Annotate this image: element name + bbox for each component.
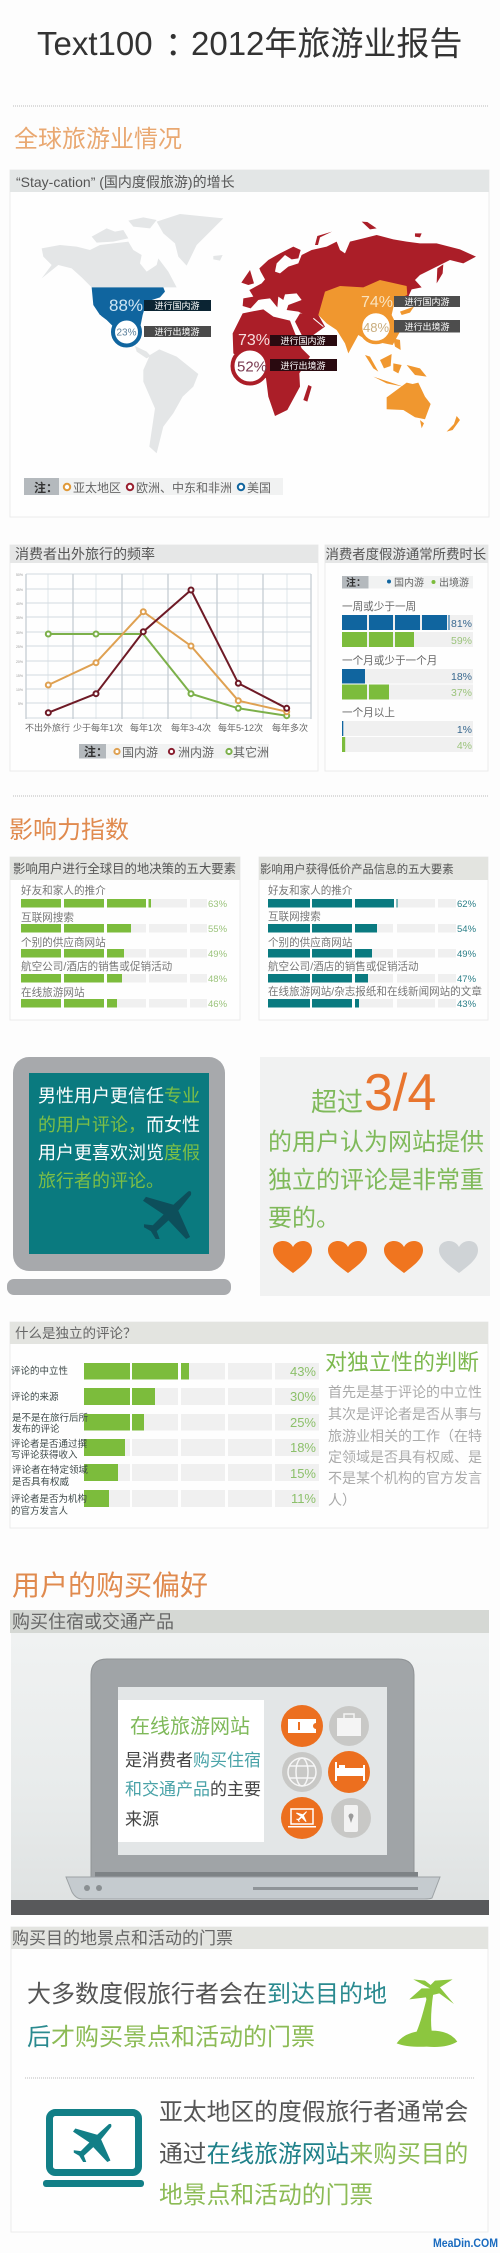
icon: bed <box>328 1751 370 1793</box>
stat: APAC outbound 48% <box>360 312 460 342</box>
x axis labels: 不出外旅行 <box>25 722 70 733</box>
callout: three quarters stat: 的用户认为网站提供 <box>268 1129 484 1156</box>
chart legend: 国内游 <box>122 746 158 760</box>
stat: US domestic 88%: 进行国内游 <box>154 300 200 311</box>
text: tickets after arrival: 大多数度假旅行者会在到达目的地 <box>27 1981 387 2008</box>
bar chart: independent review criteria: 18% <box>290 1440 316 1455</box>
text: APAC online purchase: 地景点和活动的门票 <box>159 2182 373 2209</box>
duration bars: over one month: 4% <box>457 740 472 752</box>
callout text: gender <box>38 1086 200 1191</box>
duration legend <box>342 576 473 589</box>
chart legend: 注： <box>84 744 108 759</box>
bar chart: independent review criteria: 评论的中立性 <box>11 1365 69 1377</box>
callout: three quarters stat: 要的。 <box>268 1205 340 1232</box>
bar rows: destination factors: 49% <box>208 949 228 960</box>
bar rows: destination factors: 48% <box>208 974 228 985</box>
stat: APAC domestic 74%: 74% <box>361 294 393 311</box>
duration bars: one month or less: 一个月或少于一个月 <box>342 655 437 667</box>
icon: plane <box>143 1191 191 1239</box>
stat: US outbound 23%: 进行出境游 <box>154 326 200 337</box>
duration bars: over one month: 1% <box>457 724 472 736</box>
map legend: 注： <box>34 480 58 495</box>
stat: EMEA outbound 52%: 52% <box>237 358 267 376</box>
text card: online travel sites: 来源 <box>125 1810 159 1829</box>
callout text: gender: 男性用户更信任专业 <box>38 1086 200 1106</box>
x axis labels <box>25 722 308 733</box>
panel: travel frequency line chart <box>10 545 318 771</box>
bar rows: low-price factors: 43% <box>457 999 477 1010</box>
map: red europe, middle east and africa <box>233 222 476 416</box>
panel: buying accommodation and transport <box>10 1610 489 1915</box>
stat: APAC domestic 74%: 进行国内游 <box>404 296 450 307</box>
text: judging independence: 首先是基于评论的中立性 <box>328 1384 482 1400</box>
duration legend: 注： <box>346 576 366 589</box>
icon: phone map <box>331 1798 371 1838</box>
callout text: gender: 旅行者的评论。 <box>38 1171 164 1191</box>
line chart: 10% <box>16 688 23 692</box>
bar chart: independent review criteria: 15% <box>290 1466 316 1481</box>
bar rows: low-price factors: 62% <box>457 899 477 910</box>
panel: destination decision factors <box>10 857 240 1020</box>
x axis labels: 每年3-4次 <box>171 722 211 733</box>
x axis labels: 每年5-12次 <box>218 722 263 733</box>
text card: online travel sites <box>118 1700 264 1842</box>
callout: three quarters stat: 超过 <box>311 1087 363 1117</box>
map legend: 亚太地区 <box>73 480 121 495</box>
stat: US outbound 23%: 23% <box>116 328 137 338</box>
panel header: tickets: 购买目的地景点和活动的门票 <box>12 1929 233 1948</box>
text: judging independence: 对独立性的判断 <box>325 1350 479 1375</box>
icon: suitcase <box>329 1706 369 1746</box>
line: domestic <box>46 609 289 714</box>
text: judging independence: 其次是评论者是否从事与 <box>328 1406 482 1422</box>
bar rows: low-price factors: 在线旅游网站/杂志报纸和在线新闻网站的文章 <box>268 985 482 998</box>
duration bars: one week or less: 一周或少于一周 <box>342 601 416 613</box>
bar chart: independent review criteria: 43% <box>290 1364 316 1379</box>
heading: purchase preferences: 用户的购买偏好 <box>12 1570 208 1601</box>
map legend: 美国 <box>247 481 271 495</box>
laptop illustration <box>66 1659 440 1899</box>
duration bars: one month or less <box>342 655 473 700</box>
bar rows: destination factors: 在线旅游网站 <box>21 986 85 999</box>
duration bars: one week or less: 81% <box>451 618 472 630</box>
map legend <box>24 478 283 495</box>
panel header: low-price factors <box>259 857 488 880</box>
title: Text100 <box>37 25 153 62</box>
icon: laptop plane <box>281 1797 323 1839</box>
bar rows: low-price factors: 49% <box>457 949 477 960</box>
panel: buying attractions tickets <box>11 1927 488 2232</box>
line chart: 5% <box>18 702 23 706</box>
callout: three quarters stat: 独立的评论是非常重 <box>268 1167 484 1194</box>
bar chart: independent review criteria <box>11 1363 319 1517</box>
panel header: low-price factors: 影响用户获得低价产品信息的五大要素 <box>260 862 454 876</box>
bar rows: low-price factors: 个别的供应商网站 <box>268 936 353 949</box>
callout text: gender: 用户更喜欢浏览度假 <box>38 1143 200 1163</box>
text: tickets after arrival: 后才购买景点和活动的门票 <box>27 2024 315 2051</box>
line chart: 25% <box>16 645 23 649</box>
stat: US outbound 23% <box>113 318 211 346</box>
x axis labels: 少于每年1次 <box>73 722 123 733</box>
text card: online travel sites: 是消费者购买住宿 <box>125 1751 261 1770</box>
bar chart: independent review criteria: 11% <box>291 1491 316 1506</box>
panel header: frequency: 消费者出外旅行的频率 <box>15 546 155 562</box>
stat: EMEA domestic 73%: 73% <box>238 332 270 349</box>
bar chart: independent review criteria: 是否具有权威 <box>12 1476 70 1488</box>
bar rows: low-price factors: 好友和家人的推介 <box>268 884 353 897</box>
text: judging independence: 不是某个机构的官方发言 <box>328 1470 482 1486</box>
panel header: frequency <box>10 545 318 563</box>
bar chart: independent review criteria: 评论的来源 <box>11 1391 59 1403</box>
x axis labels: 每年多次 <box>272 722 308 733</box>
stat: EMEA outbound 52%: 进行出境游 <box>280 360 326 371</box>
title: 2012年旅游业报告 <box>191 25 462 62</box>
text: judging independence <box>325 1350 482 1508</box>
stat: EMEA domestic 73%: 进行国内游 <box>280 335 326 346</box>
callout text: gender: 的用户评论，而女性 <box>38 1115 200 1135</box>
duration bars: one week or less: 59% <box>451 635 472 647</box>
duration bars: one week or less <box>342 601 473 647</box>
stat: US domestic 88%: 88% <box>109 296 143 315</box>
stat: APAC outbound 48%: 48% <box>363 320 389 335</box>
bar rows: destination factors: 46% <box>208 999 228 1010</box>
line: other continents <box>46 632 289 718</box>
chart legend: 洲内游 <box>178 746 214 760</box>
icon: hearts rating <box>273 1241 478 1273</box>
line chart: 35% <box>16 616 23 620</box>
icon: globe <box>282 1752 322 1792</box>
bar chart: independent review criteria: 评论者是否为机构 <box>11 1493 87 1505</box>
panel header: stay-cation: “Stay-cation” (国内度假旅游)的增长 <box>16 174 235 190</box>
panel: low-price information factors <box>259 857 488 1020</box>
title: ： <box>165 25 198 62</box>
text: judging independence: 人） <box>328 1492 356 1508</box>
icon: palm island <box>397 1979 457 2047</box>
panel header: independent review <box>10 1322 488 1344</box>
duration bars: one month or less: 37% <box>451 687 472 699</box>
line: within continent <box>46 588 289 715</box>
text: judging independence: 旅游业相关的工作（在特 <box>328 1428 482 1444</box>
text: APAC online purchase: 通过在线旅游网站来购买目的 <box>159 2141 468 2168</box>
duration bars: over one month: 一个月以上 <box>342 707 395 719</box>
panel header: duration: 消费者度假游通常所费时长 <box>326 547 486 562</box>
line chart: 40% <box>16 602 23 606</box>
bar rows: low-price factors: 互联网搜索 <box>268 910 321 923</box>
bar chart: independent review criteria: 评论者在特定领域 <box>12 1464 89 1476</box>
bar chart: independent review criteria: 30% <box>290 1389 316 1404</box>
bar chart: independent review criteria: 是不是在旅行后所 <box>12 1412 89 1424</box>
bar chart: independent review criteria: 发布的评论 <box>12 1423 60 1435</box>
line chart: 45% <box>16 588 23 592</box>
bar rows: destination factors: 个别的供应商网站 <box>21 936 106 949</box>
panel header: accommodation <box>10 1610 489 1633</box>
line chart: 30% <box>16 631 23 635</box>
bar chart: independent review criteria: 写评论获得收入 <box>11 1449 78 1461</box>
icon: teal laptop with plane <box>43 2112 144 2187</box>
line chart: 15% <box>16 674 23 678</box>
map: blue united states <box>92 287 165 332</box>
panel header: stay-cation <box>10 170 489 192</box>
bar rows: destination factors: 55% <box>208 924 228 935</box>
stat: EMEA outbound 52% <box>232 348 337 384</box>
callout: three quarters stat <box>260 1057 490 1296</box>
panel header: accommodation: 购买住宿或交通产品 <box>12 1612 174 1632</box>
map: orange asia-pacific <box>318 280 460 432</box>
text: APAC online purchase <box>159 2099 468 2209</box>
duration legend: 出境游 <box>439 576 469 589</box>
stat: APAC outbound 48%: 进行出境游 <box>404 321 450 332</box>
stat: US domestic 88% <box>109 296 211 315</box>
map: grey americas <box>42 214 223 453</box>
icon: ticket <box>281 1705 323 1747</box>
duration bars: one month or less: 18% <box>451 671 472 683</box>
bar rows: destination factors: 互联网搜索 <box>21 911 74 924</box>
line chart: 50% <box>16 573 23 577</box>
stat: EMEA domestic 73% <box>238 332 337 349</box>
bar rows: low-price factors: 航空公司/酒店的销售或促销活动 <box>268 960 419 973</box>
callout: laptop gender trust <box>7 1057 231 1295</box>
line chart: 20% <box>16 660 23 664</box>
text: APAC online purchase: 亚太地区的度假旅行者通常会 <box>159 2099 468 2126</box>
panel header: tickets <box>11 1927 488 1949</box>
stat: APAC domestic 74% <box>361 294 460 311</box>
x axis labels: 每年1次 <box>130 722 162 733</box>
map legend: 欧洲、中东和非洲 <box>136 480 232 495</box>
callout: three quarters stat: 3/4 <box>364 1064 436 1122</box>
heading: influence index: 影响力指数 <box>9 817 129 844</box>
text: tickets after arrival <box>27 1981 387 2051</box>
bar chart: independent review criteria: 的官方发言人 <box>11 1505 69 1517</box>
chart legend: 其它洲 <box>233 744 269 760</box>
text: judging independence: 定领域是否具有权威、是 <box>328 1449 482 1465</box>
line chart <box>16 573 311 733</box>
bar rows: destination factors: 63% <box>208 899 228 910</box>
heading: global travel: 全球旅游业情况 <box>14 126 182 153</box>
panel: stay-cation map <box>10 170 489 517</box>
bar chart: independent review criteria: 25% <box>290 1415 316 1430</box>
bar rows: low-price factors <box>268 884 482 1010</box>
text card: online travel sites: 在线旅游网站 <box>130 1715 250 1738</box>
duration bars: over one month <box>342 707 473 752</box>
duration legend: 国内游 <box>394 576 424 589</box>
chart legend <box>79 744 269 760</box>
panel header: independent review: 什么是独立的评论？ <box>15 1326 136 1341</box>
bar rows: destination factors: 好友和家人的推介 <box>21 884 106 897</box>
bar rows: low-price factors: 47% <box>457 974 477 985</box>
panel: what is an independent review <box>10 1322 488 1528</box>
panel header: destination factors <box>10 857 240 880</box>
text card: online travel sites: 和交通产品的主要 <box>125 1780 261 1799</box>
bar rows: low-price factors: 54% <box>457 924 477 935</box>
bar chart: independent review criteria: 评论者是否通过撰 <box>11 1438 88 1450</box>
panel: trip duration <box>325 545 488 771</box>
bar rows: destination factors <box>21 884 228 1010</box>
panel header: destination factors: 影响用户进行全球目的地决策的五大要素 <box>13 861 236 876</box>
bar rows: destination factors: 航空公司/酒店的销售或促销活动 <box>21 960 172 973</box>
